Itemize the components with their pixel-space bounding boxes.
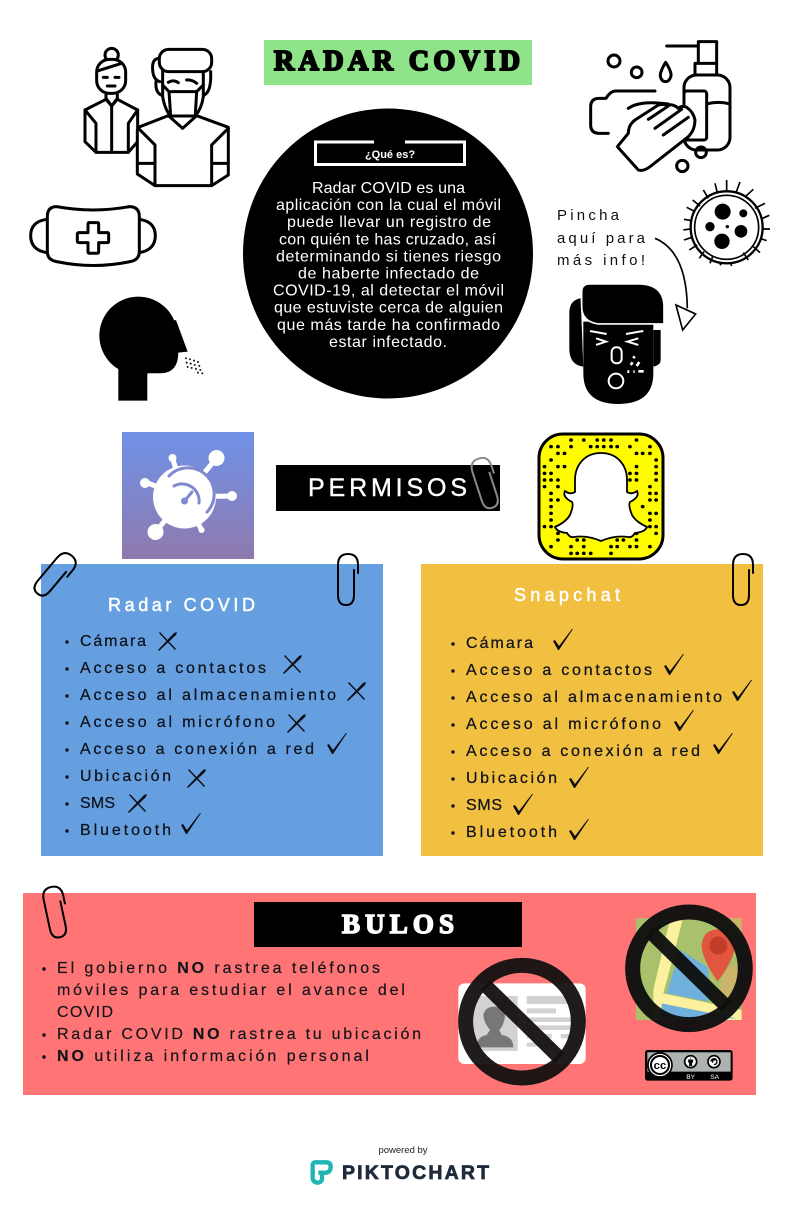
panel: what is it circle: puede llevar un registro de: [287, 214, 491, 231]
icon: no location map: [633, 912, 745, 1025]
title: RADAR COVID: [274, 46, 520, 77]
panel: Snapchat permissions: SMS: [466, 797, 502, 814]
panel: what is it circle: [243, 108, 533, 398]
footer: powered by Piktochart: [313, 1145, 489, 1184]
panel: Radar COVID permissions: [31, 549, 383, 856]
panel: what is it circle: que más tarde ha confirmado: [277, 317, 500, 334]
panel: Radar COVID permissions: Acceso a conexión a red: [80, 741, 314, 758]
panel: what is it circle: estar infectado.: [329, 334, 447, 351]
icon: no ID card: [458, 965, 586, 1078]
icon: Radar COVID app: [122, 432, 254, 559]
footer: powered by Piktochart: powered by: [378, 1145, 428, 1156]
heading: permisos: [276, 456, 504, 511]
panel: Snapchat permissions: Bluetooth: [466, 824, 557, 841]
footer: powered by Piktochart: PIKTOCHART: [342, 1162, 489, 1184]
panel: what is it circle: determinando si tienes riesgo: [276, 248, 501, 265]
icon: Snapchat code: [539, 434, 663, 559]
heading: permisos: PERMISOS: [308, 474, 467, 502]
text: click here for more info: más info!: [557, 252, 645, 269]
icon: hand washing with soap: [591, 42, 730, 172]
icon: medical staff: [85, 48, 228, 186]
text: myths list: móviles para estudiar el avance del: [57, 982, 405, 999]
panel: what is it circle: con quién te has cruzado, así: [279, 231, 497, 248]
panel: Radar COVID permissions: Radar COVID: [108, 595, 255, 615]
icon: creative commons badge: BY: [686, 1074, 696, 1081]
icon: face mask: [31, 207, 155, 265]
panel: what is it circle: COVID-19, al detectar el móvil: [273, 283, 504, 300]
panel: Radar COVID permissions: Acceso al almacenamiento: [80, 687, 336, 704]
icon: cross marks and checks: [128, 632, 366, 834]
panel: Snapchat permissions: Cámara: [466, 635, 533, 652]
panel: Snapchat permissions: [421, 554, 763, 856]
title: [264, 40, 532, 85]
text: myths list: [42, 960, 421, 1065]
icon: creative commons badge: [645, 1050, 733, 1081]
icon: check marks: [513, 629, 752, 840]
icon: creative commons badge: cc: [654, 1060, 666, 1072]
panel: Radar COVID permissions: Bluetooth: [80, 822, 171, 839]
panel: what is it circle: de haberte infectado de: [298, 266, 479, 282]
panel: Radar COVID permissions: Acceso al micrófono: [80, 714, 275, 731]
text: myths list: NO utiliza información personal: [57, 1048, 369, 1065]
panel: bulos: [23, 885, 756, 1095]
panel: Radar COVID permissions: Cámara: [80, 633, 146, 650]
icon: virus: [683, 180, 770, 266]
icon: creative commons badge: SA: [710, 1074, 720, 1081]
panel: Snapchat permissions: Snapchat: [514, 585, 620, 605]
text: click here for more info: aquí para: [557, 230, 646, 247]
panel: Snapchat permissions: Ubicación: [466, 770, 557, 787]
panel: Snapchat permissions: Acceso al almacenamiento: [466, 689, 722, 706]
text: myths list: El gobierno NO rastrea teléfonos: [57, 960, 380, 977]
panel: Snapchat permissions: Acceso a conexión a red: [466, 743, 700, 760]
arrow: pointing to face: [655, 238, 696, 330]
panel: Snapchat permissions: Acceso a contactos: [466, 662, 652, 679]
icon: coughing head: [99, 297, 202, 401]
panel: what is it circle: ¿Qué es?: [365, 149, 415, 161]
panel: Snapchat permissions: Acceso al micrófono: [466, 716, 661, 733]
text: myths list: Radar COVID NO rastrea tu ubicación: [57, 1026, 421, 1043]
icon: sneezing face: [569, 284, 664, 404]
panel: Radar COVID permissions: Acceso a contactos: [80, 660, 266, 677]
text: myths list: COVID: [57, 1004, 113, 1021]
heading: bulos: [254, 902, 522, 947]
panel: what is it circle: Radar COVID es una: [312, 180, 465, 197]
panel: what is it circle: aplicación con la cual el móvil: [276, 197, 501, 214]
panel: what is it circle: que estuviste cerca de alguien: [274, 300, 503, 317]
panel: Radar COVID permissions: SMS: [80, 795, 115, 812]
text: click here for more info: Pincha: [557, 207, 620, 224]
panel: Radar COVID permissions: Ubicación: [80, 768, 171, 785]
text: click here for more info: [557, 207, 646, 269]
heading: bulos: BULOS: [342, 909, 454, 939]
